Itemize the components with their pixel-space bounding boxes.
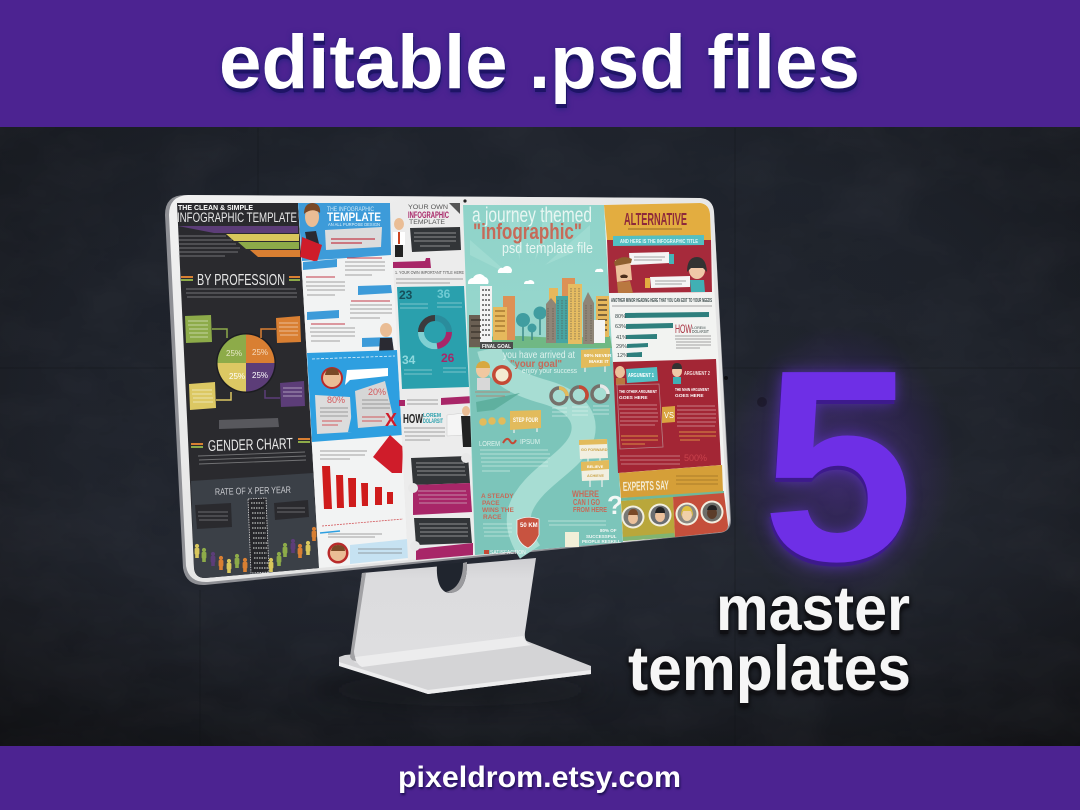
final goal label: FINAL GOAL (482, 344, 512, 350)
background: dark concrete wall (0, 120, 1080, 755)
blue template heading (325, 206, 382, 250)
teal stats box (397, 286, 469, 389)
yellow sign 90 percent: 90% NEVER (584, 353, 612, 359)
clouds (468, 266, 603, 284)
arrived text: "your goal" (510, 358, 562, 370)
monitor body (165, 195, 731, 585)
pie chart 25 percent quarters: 25% (252, 348, 268, 357)
lorem ipsum row (479, 439, 550, 471)
pie chart 25 percent quarters: 25% (252, 371, 268, 380)
screen with five infographic templates (177, 203, 728, 578)
red argument section: 500% (684, 453, 707, 463)
how section (399, 396, 474, 447)
heading: gender chart (191, 436, 310, 464)
panel: pink and teal template (390, 203, 475, 560)
experts say banner: EXPERTS SAY (623, 477, 669, 494)
city skyline (469, 278, 612, 348)
note square and stat: SUCCESSFUL (586, 534, 617, 539)
note square and stat: SATISFACTION (490, 550, 526, 556)
where can I go (572, 489, 623, 520)
panel: journey themed template (463, 203, 623, 556)
pink tag and section heading: 1. YOUR OWN IMPORTANT TITLE HERE (395, 270, 464, 276)
white percentage bars: LOREM (692, 326, 706, 330)
red bar chart (320, 451, 393, 509)
teal stats box: 34 (402, 353, 416, 367)
panel: clean and simple dark template (177, 203, 319, 578)
teal stats box: 26 (441, 351, 455, 365)
note square and stat (484, 521, 621, 556)
panel: alternative template (604, 203, 728, 542)
neck (352, 558, 536, 663)
where can I go: WHERE (572, 489, 599, 500)
direction signs: GO FORWARD (581, 448, 608, 452)
50 km shield (517, 517, 539, 548)
section title and quote strip (320, 519, 408, 564)
alternative heading (624, 209, 687, 229)
lorem ipsum row: IPSUM (520, 439, 540, 446)
rate chart: RATE OF X PER YEAR (215, 485, 291, 498)
panel: blue and white template (298, 203, 408, 568)
pink template heading: TEMPLATE (409, 220, 445, 226)
footer band (0, 746, 1080, 810)
rate chart (195, 485, 316, 573)
red argument section: ARGUMENT 1 (628, 373, 654, 379)
pie chart 25 percent quarters: 25% (229, 372, 245, 381)
big number 5: 5 (762, 313, 914, 618)
where can I go: ? (607, 490, 623, 520)
arrived text (503, 349, 577, 375)
cartoon man and red note (300, 203, 322, 262)
how section: LOREM (423, 413, 441, 419)
three progress rings (551, 386, 609, 416)
experts say banner (619, 465, 723, 498)
white percentage bars: ANOTHER MINOR HEADING HERE THAT YOU CAN EDIT TO YOUR NEEDS (611, 298, 712, 304)
caption: master templates (628, 574, 911, 704)
heading: gender chart: GENDER CHART (208, 436, 293, 455)
red argument section (613, 359, 721, 473)
red comic section (607, 235, 712, 293)
blue template heading: AN ALL PURPOSE DESIGN (328, 222, 380, 227)
journey heading: "infographic" (473, 219, 582, 244)
heading: by profession (181, 272, 300, 297)
step four sign with dots (479, 410, 541, 433)
expert portraits (621, 491, 728, 541)
footer url: pixeldrom.etsy.com (398, 761, 681, 794)
red argument section: GOES HERE (675, 393, 704, 399)
red comic section: AND HERE IS THE INFOGRAPHIC TITLE (620, 239, 699, 245)
blue template heading: THE INFOGRAPHIC (327, 206, 374, 213)
white percentage bars: 29% (616, 344, 627, 350)
green sash (476, 393, 520, 412)
grey note bar (219, 418, 279, 429)
yellow sign 90 percent (581, 348, 612, 372)
note square and stat: PEOPLE RESKILL (582, 539, 621, 544)
red argument section: THE OTHER ARGUMENT (619, 389, 657, 395)
alternative heading: ALTERNATIVE (624, 209, 687, 229)
red argument section: VS (664, 411, 674, 420)
steady pace (481, 493, 514, 536)
purple glow behind the 5 (725, 325, 955, 605)
step four sign with dots: STEP FOUR (513, 418, 538, 424)
journey heading (472, 203, 593, 257)
steady pace: RACE (483, 514, 502, 521)
journey heading: psd template file (502, 240, 593, 257)
pink template heading (408, 203, 460, 226)
blue percent section: 20% (368, 387, 386, 397)
pink tag and section heading (393, 258, 464, 283)
journey heading: a journey themed (472, 203, 592, 227)
blue percent section (307, 350, 402, 442)
title: editable .psd files (219, 20, 860, 105)
steady pace: WINS THE (482, 507, 514, 514)
red note (373, 435, 403, 473)
header band (0, 0, 1080, 127)
direction signs: BELIEVE (587, 465, 604, 469)
monitor stand (310, 558, 610, 706)
pie chart 25 percent quarters (216, 333, 276, 393)
pie chart 25 percent quarters: 25% (226, 349, 242, 358)
caption: master templates: templates (628, 634, 911, 704)
blue percent section: 80% (327, 395, 345, 405)
white percentage bars: 63% (615, 324, 626, 330)
direction signs: ACHIEVE (587, 474, 604, 478)
dark and pink text ribbons (408, 453, 473, 560)
white percentage bars: 41% (616, 335, 627, 341)
pink template heading: YOUR OWN (408, 205, 448, 211)
teal stats box: 23 (399, 288, 413, 302)
white percentage bars: 80% (615, 314, 626, 320)
callout boxes around the pie (185, 315, 305, 410)
how section: DOLARSIT (423, 418, 443, 425)
how section: HOW (403, 411, 423, 426)
steady pace: PACE (482, 500, 500, 507)
winding road (489, 349, 584, 552)
businessman and dark box (393, 218, 461, 257)
red argument section: GOES HERE (619, 395, 648, 401)
50 km shield: 50 KM (520, 523, 538, 529)
teal stats box: 36 (437, 287, 451, 301)
template heading (177, 205, 297, 225)
final goal label (480, 342, 513, 350)
blue template heading: TEMPLATE (327, 210, 381, 224)
white percentage bars: HOW (675, 322, 692, 336)
heading: by profession: BY PROFESSION (197, 272, 285, 289)
blue percent section: X (385, 410, 397, 430)
foot (339, 640, 591, 694)
pink template heading: INFOGRAPHIC (408, 210, 449, 221)
steady pace: A STEADY (481, 493, 514, 500)
yellow sign 90 percent: MAKE IT (589, 359, 609, 365)
lorem ipsum row: LOREM (479, 441, 500, 448)
face with 10 percent badge (475, 361, 512, 396)
direction signs (579, 439, 609, 487)
template heading: THE CLEAN & SIMPLE (178, 205, 253, 212)
where can I go: FROM HERE (573, 507, 607, 514)
note square and stat: 80% OF (600, 528, 617, 533)
white percentage bars: DOLARSIT (692, 329, 709, 334)
arrived text: you have arrived at (503, 349, 575, 361)
template heading: INFOGRAPHIC TEMPLATE (177, 210, 297, 225)
red argument section: ARGUMENT 2 (684, 371, 710, 377)
colour stripes (178, 226, 300, 257)
red argument section: THE MAIN ARGUMENT (675, 387, 709, 393)
sun rays (470, 210, 590, 275)
white percentage bars: 12% (617, 353, 628, 359)
arrived text: enjoy your success (522, 366, 577, 375)
where can I go: CAN I GO (573, 498, 600, 507)
caption: master templates: master (716, 574, 910, 644)
tab labels and text (303, 258, 394, 352)
white percentage bars (611, 298, 712, 359)
